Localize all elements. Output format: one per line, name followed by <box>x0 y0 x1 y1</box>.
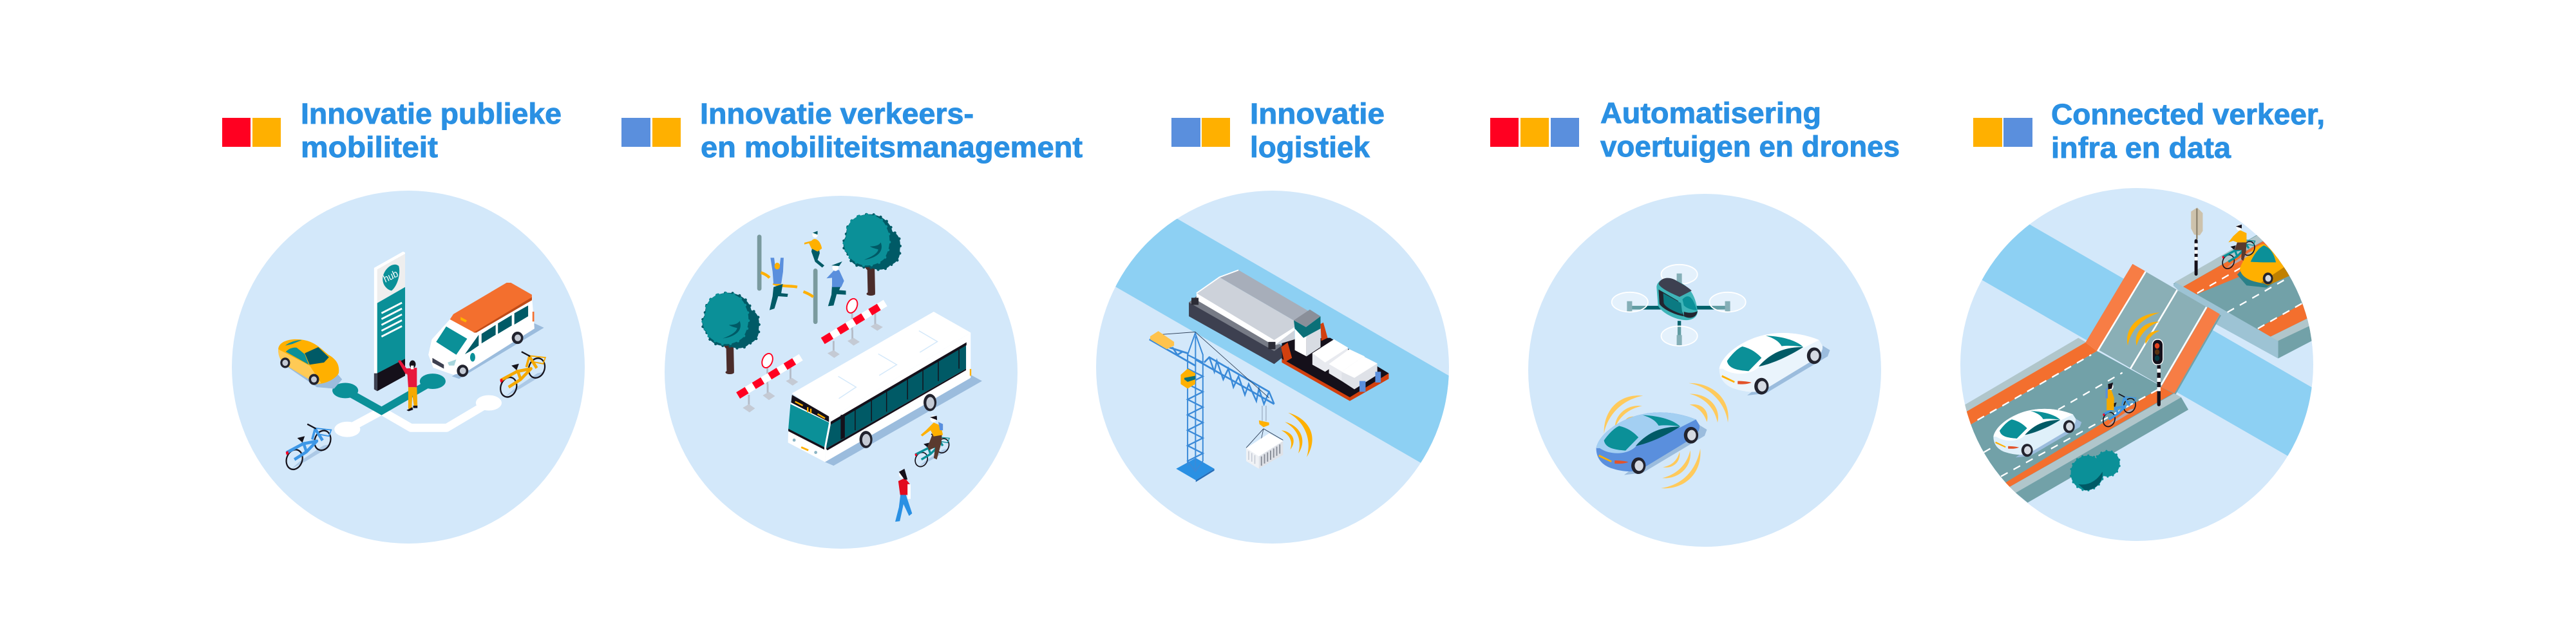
runner yellow <box>804 231 824 268</box>
signal waves around blue car <box>1604 383 1728 488</box>
circle background <box>1096 191 1449 544</box>
heading: connected verkeer: Connected verkeer, <box>2051 98 2325 131</box>
signal waves <box>1282 413 1312 457</box>
heading: automatisering: voertuigen en drones <box>1600 130 1900 163</box>
runner light blue <box>826 261 846 306</box>
heading: connected verkeer <box>1973 98 2325 164</box>
tower crane <box>1150 331 1274 482</box>
water <box>1982 224 2312 456</box>
white route <box>334 395 502 437</box>
cyclist <box>913 415 951 469</box>
blue bike <box>283 424 334 472</box>
drone <box>1612 265 1746 346</box>
circle background <box>1960 188 2313 541</box>
water band <box>1115 219 1449 462</box>
runner blue <box>770 258 788 310</box>
circle background <box>232 191 585 544</box>
cyclist on far road <box>2221 225 2257 270</box>
bus <box>788 312 982 466</box>
panel: innovatie verkeers- en mobiliteitsmanagement <box>621 97 1083 549</box>
scene: automated vehicles <box>1596 265 1830 488</box>
heading: logistiek <box>1171 97 1385 164</box>
road barrier 1 <box>823 297 886 358</box>
yellow bike <box>498 352 548 400</box>
teal route <box>332 374 446 411</box>
hub sign <box>374 252 405 391</box>
pedestrian <box>895 469 912 522</box>
panel: innovatie logistiek <box>1090 97 1474 544</box>
raised bridge deck <box>2085 264 2221 394</box>
traffic light <box>2152 339 2163 406</box>
panel: automatisering voertuigen en drones <box>1490 97 1900 547</box>
minibus <box>428 283 544 379</box>
cyclist with blue bike <box>2101 383 2137 429</box>
scene: connected bridge <box>1965 207 2312 502</box>
barge with hall <box>1189 270 1388 401</box>
circle background <box>665 196 1018 549</box>
yellow car <box>2237 244 2292 288</box>
signal waves <box>2127 312 2160 346</box>
panel: innovatie publieke mobiliteit <box>222 97 585 544</box>
road sign pole <box>2191 207 2202 276</box>
white car <box>1719 333 1830 395</box>
person <box>398 360 417 411</box>
heading: publieke mobiliteit: Innovatie publieke <box>301 97 562 130</box>
far road <box>2173 235 2312 359</box>
near road <box>1956 338 2188 503</box>
white car <box>1993 409 2081 457</box>
suspended container <box>1246 406 1283 469</box>
panel: connected verkeer, infra en data <box>1960 103 2324 541</box>
heading: logistiek: Innovatie <box>1250 97 1385 130</box>
scene: traffic management <box>703 214 982 522</box>
heading: connected verkeer: infra en data <box>2051 131 2231 164</box>
heading: verkeers- en mobiliteitsmanagement: Innovatie verkeers- <box>700 97 974 130</box>
heading: automatisering <box>1490 97 1900 163</box>
trees <box>703 214 900 374</box>
finish poles and ribbon <box>757 234 818 324</box>
yellow car <box>278 339 342 389</box>
heading: publieke mobiliteit: mobiliteit <box>301 131 438 164</box>
scene: mobility hub <box>278 252 548 472</box>
heading: publieke mobiliteit <box>222 97 562 164</box>
heading: verkeers- en mobiliteitsmanagement <box>621 97 1083 164</box>
road barrier 2 <box>738 352 801 412</box>
hub sign: hub <box>382 269 400 285</box>
heading: automatisering: Automatisering <box>1600 97 1821 129</box>
scene: logistics <box>1150 270 1388 482</box>
bushes <box>2070 451 2120 490</box>
blue car <box>1596 412 1707 475</box>
heading: verkeers- en mobiliteitsmanagement: en mobiliteitsmanagement <box>701 131 1083 164</box>
heading: logistiek: logistiek <box>1250 131 1370 164</box>
circle background <box>1528 194 1881 547</box>
